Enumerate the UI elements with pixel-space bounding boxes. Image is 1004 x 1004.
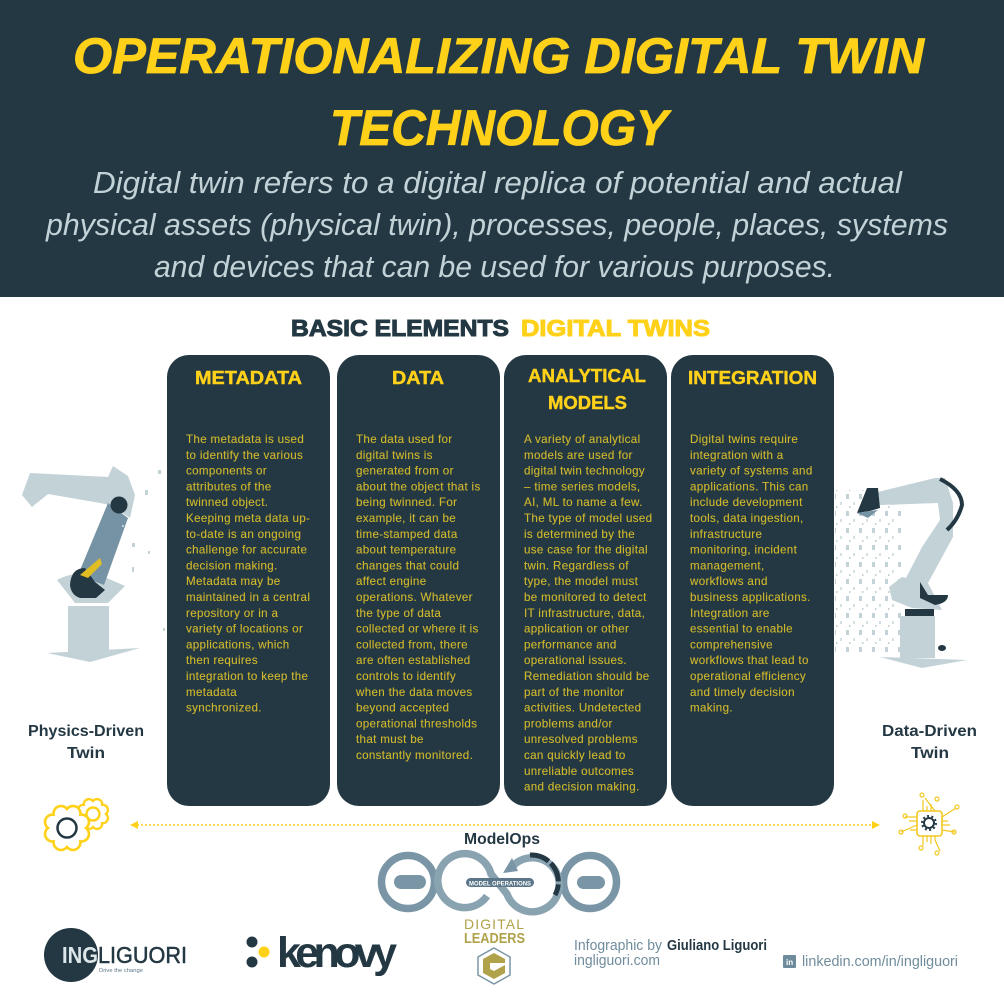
metadata text: challenge for accurate (186, 544, 307, 557)
integration text: variety of systems and (690, 465, 813, 478)
integration text: Digital twins require (690, 433, 798, 446)
diagram: modelops loop (382, 854, 616, 912)
integration heading: INTEGRATION (688, 368, 817, 388)
section heading (291, 315, 710, 341)
analytical models text: part of the monitor (524, 686, 624, 699)
analytical models text: application or other (524, 623, 629, 636)
logo: digital leaders: DIGITAL (464, 916, 524, 932)
label: physics-driven twin: Physics-Driven (28, 723, 144, 740)
metadata text: integration to keep the (186, 670, 308, 683)
logo: ingliguori: ING (62, 942, 98, 968)
analytical models text: performance and (524, 638, 617, 651)
title (73, 28, 925, 156)
integration text: operational efficiency (690, 670, 806, 683)
data text: generated from or (356, 465, 454, 478)
data text: that must be (356, 733, 424, 746)
header banner (0, 0, 1004, 297)
data text: The data used for (356, 433, 452, 446)
analytical models text: unreliable outcomes (524, 765, 634, 778)
section heading: DIGITAL TWINS (521, 315, 710, 341)
integration text: workflows that lead to (689, 654, 809, 667)
integration text: management, (690, 559, 765, 572)
integration text: infrastructure (690, 528, 762, 541)
integration text: applications. This can (690, 480, 809, 493)
data text: being twinned. For (356, 496, 457, 509)
metadata text: metadata (186, 686, 237, 699)
logo: ingliguori: Drive the change (99, 968, 143, 974)
data text: the type of data (356, 607, 441, 620)
metadata text: The metadata is used (186, 433, 304, 446)
title: OPERATIONALIZING DIGITAL TWIN (73, 28, 925, 84)
panel: analytical models (504, 355, 667, 806)
logo: ingliguori (44, 928, 187, 982)
modelops heading: ModelOps (464, 831, 540, 848)
panel: metadata (167, 355, 330, 806)
integration text: integration with a (690, 449, 784, 462)
credit text (574, 938, 767, 969)
integration text: monitoring, incident (690, 544, 798, 557)
analytical models text: type, the model must (524, 575, 639, 588)
credit text: Infographic by (574, 938, 663, 954)
analytical models text: use case for the digital (524, 544, 648, 557)
data text: about the object that is (356, 480, 481, 493)
subtitle (45, 165, 948, 284)
analytical models text: activities. Undetected (524, 702, 641, 715)
metadata text: variety of locations or (186, 623, 303, 636)
credit text: Giuliano Liguori (667, 938, 767, 954)
subtitle: and devices that can be used for various purposes. (154, 249, 835, 284)
integration text: tools, data ingestion, (690, 512, 804, 525)
analytical models text: be monitored to detect (524, 591, 647, 604)
data text: operational thresholds (356, 717, 477, 730)
linkedin link: in (786, 958, 793, 967)
analytical models text: models are used for (524, 449, 633, 462)
panel: data (337, 355, 500, 806)
integration text: business applications. (690, 591, 811, 604)
analytical models text: twin. Regardless of (524, 559, 629, 572)
analytical models text: is determined by the (524, 528, 635, 541)
data text: are often established (356, 654, 471, 667)
logo: digital leaders: LEADERS (464, 930, 525, 947)
logo: ingliguori: LIGUORI (98, 942, 187, 968)
analytical models text: AI, ML to name a few. (524, 496, 643, 509)
integration text: include development (690, 496, 803, 509)
diagram: modelops loop: MODEL OPERATIONS (469, 880, 532, 888)
analytical models text: The type of model used (524, 512, 652, 525)
icon: gears (45, 799, 108, 850)
data text: operations. Whatever (356, 591, 473, 604)
analytical models heading: ANALYTICAL (528, 366, 646, 386)
label: data-driven twin: Twin (911, 745, 949, 762)
analytical models text: unresolved problems (524, 733, 638, 746)
subtitle: Digital twin refers to a digital replica of potential and actual (93, 165, 903, 200)
metadata text: to identify the various (186, 449, 303, 462)
analytical models text: operational issues. (524, 654, 627, 667)
arrow: physics to data (130, 821, 880, 829)
data text: example, it can be (356, 512, 456, 525)
integration text: Integration are (690, 607, 770, 620)
integration text: workflows and (689, 575, 768, 588)
data text: when the data moves (355, 686, 472, 699)
integration text: making. (690, 702, 733, 715)
analytical models heading: MODELS (548, 393, 627, 413)
metadata text: maintained in a central (186, 591, 310, 604)
label: physics-driven twin (28, 723, 144, 762)
robot: physics-driven (22, 466, 165, 662)
analytical models heading (528, 366, 646, 413)
metadata text: decision making. (186, 559, 278, 572)
data text: beyond accepted (356, 702, 449, 715)
metadata text: repository or in a (186, 607, 279, 620)
metadata text: twinned object. (186, 496, 268, 509)
metadata text: Metadata may be (186, 575, 281, 588)
data text: affect engine (356, 575, 426, 588)
data text: constantly monitored. (356, 749, 473, 762)
analytical models text: IT infrastructure, data, (524, 607, 645, 620)
metadata text: to-date is an ongoing (186, 528, 301, 541)
icon: circuit chip (899, 793, 959, 855)
subtitle: physical assets (physical twin), processes, people, places, systems (45, 207, 948, 242)
data text: changes that could (356, 559, 459, 572)
title: TECHNOLOGY (330, 100, 672, 156)
analytical models text: Remediation should be (524, 670, 650, 683)
label: data-driven twin: Data-Driven (882, 723, 977, 740)
data text: about temperature (356, 544, 456, 557)
label: physics-driven twin: Twin (67, 745, 105, 762)
analytical models text: and decision making. (524, 781, 640, 794)
logo: digital leaders (464, 916, 525, 984)
analytical models text: A variety of analytical (524, 433, 640, 446)
data text: collected from, there (356, 638, 468, 651)
data text: time-stamped data (356, 528, 458, 541)
metadata text: applications, which (186, 638, 290, 651)
analytical models text: can quickly lead to (524, 749, 626, 762)
metadata text: attributes of the (186, 480, 272, 493)
panel: integration (671, 355, 834, 806)
analytical models text: digital twin technology (524, 465, 645, 478)
data text: collected or where it is (356, 623, 479, 636)
metadata text: synchronized. (186, 702, 262, 715)
analytical models text: problems and/or (524, 717, 613, 730)
integration text: essential to enable (690, 623, 793, 636)
integration text: and timely decision (690, 686, 795, 699)
data text: controls to identify (356, 670, 456, 683)
data heading: DATA (392, 368, 444, 388)
section heading: BASIC ELEMENTS (291, 315, 509, 341)
data text: digital twins is (356, 449, 433, 462)
credit text: ingliguori.com (574, 953, 660, 969)
metadata text: Keeping meta data up- (186, 512, 310, 525)
metadata heading: METADATA (195, 368, 302, 388)
logo: kenovy: kenovy (277, 929, 397, 977)
robot: data-driven (835, 478, 967, 668)
linkedin link: linkedin.com/in/ingliguori (802, 954, 958, 970)
analytical models text: – time series models, (524, 480, 640, 493)
metadata text: then requires (186, 654, 258, 667)
integration text: comprehensive (690, 638, 773, 651)
label: data-driven twin (882, 723, 977, 762)
metadata text: components or (186, 465, 267, 478)
